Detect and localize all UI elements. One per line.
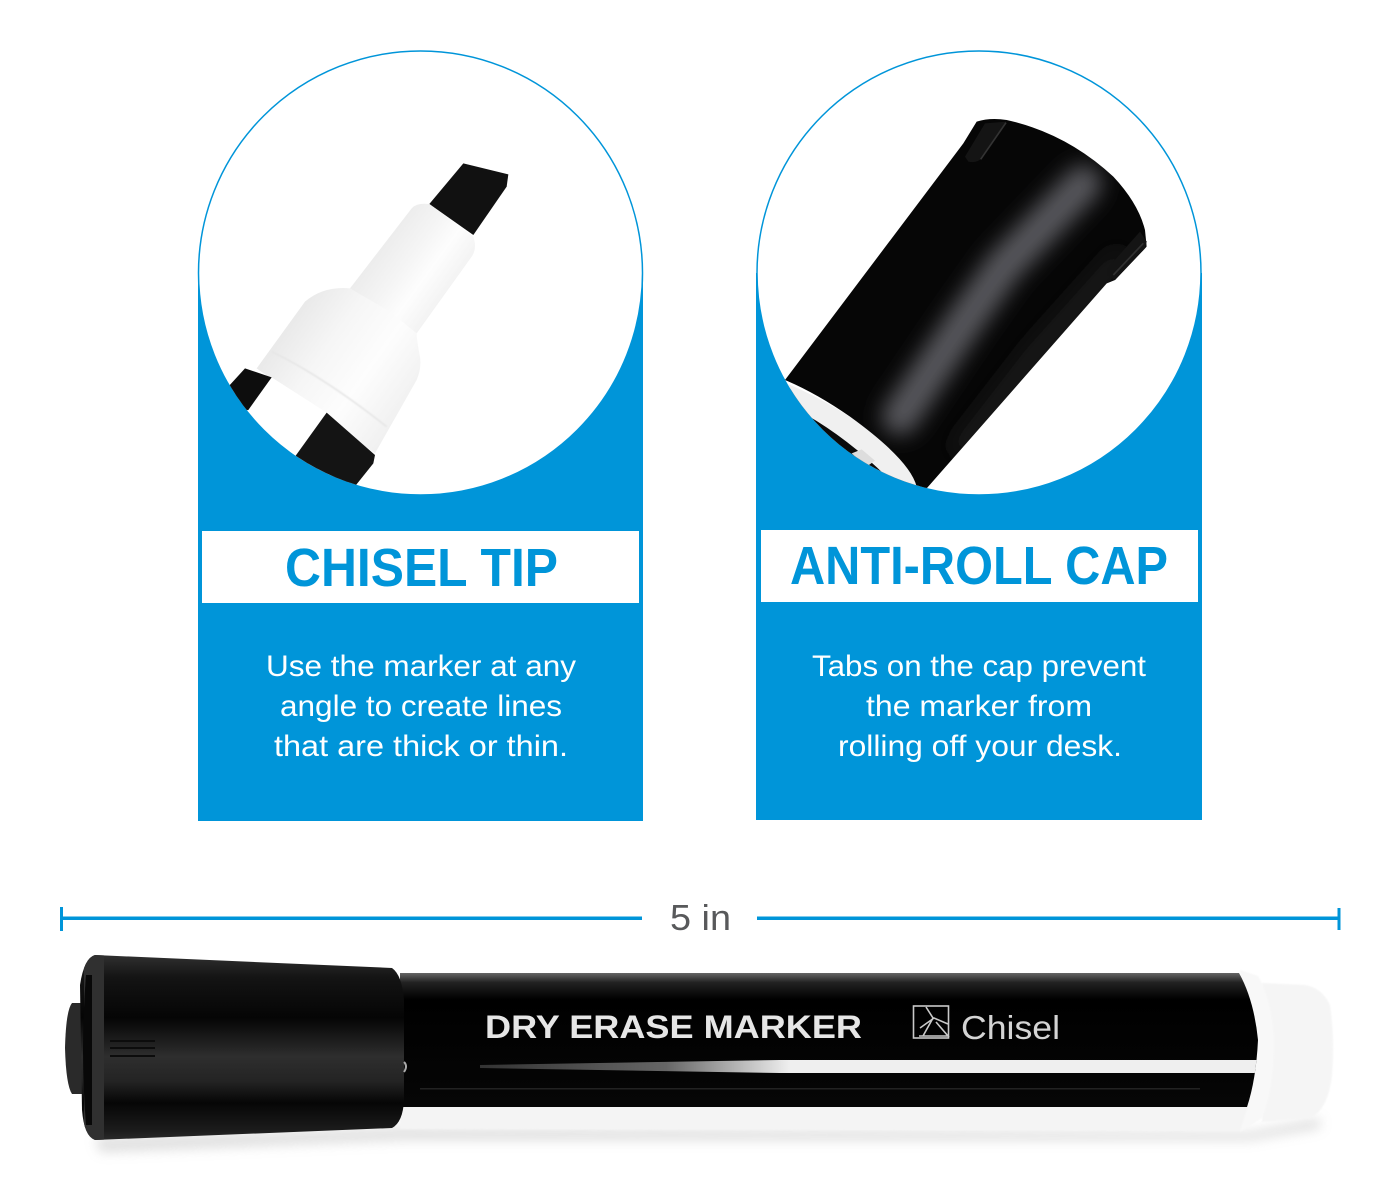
dimension label: 5 in bbox=[670, 897, 731, 938]
panel background bbox=[198, 273, 643, 821]
marker label text: DRY ERASE MARKER bbox=[485, 1009, 862, 1045]
description: rolling off your desk. bbox=[838, 730, 1122, 763]
description bbox=[266, 650, 576, 763]
product: dry erase marker bbox=[65, 950, 1333, 1152]
panel: chisel tip bbox=[198, 51, 643, 821]
marker barrel underside bbox=[400, 1100, 1250, 1131]
marker shadow bbox=[95, 1118, 1320, 1152]
heading band bbox=[761, 530, 1198, 602]
description: the marker from bbox=[866, 690, 1092, 723]
description: Tabs on the cap prevent bbox=[812, 650, 1147, 683]
heading: ANTI-ROLL CAP bbox=[790, 536, 1168, 596]
marker cap bbox=[65, 950, 410, 1145]
heading: CHISEL TIP bbox=[285, 538, 558, 598]
illustration: marker chisel tip bbox=[223, 163, 508, 488]
description: that are thick or thin. bbox=[274, 730, 568, 763]
chisel logo bbox=[914, 1006, 948, 1038]
illustration: marker cap with tabs bbox=[785, 119, 1147, 488]
cap end nub bbox=[65, 1003, 84, 1094]
circle window bbox=[198, 51, 642, 495]
dimension ruler: 5 in bbox=[60, 897, 1340, 938]
description bbox=[812, 650, 1147, 763]
marker tip end bbox=[1262, 983, 1333, 1122]
brand name: Chisel bbox=[961, 1009, 1060, 1046]
description: Use the marker at any bbox=[266, 650, 576, 683]
panel background bbox=[756, 273, 1202, 820]
heading band bbox=[202, 531, 639, 603]
circle window bbox=[757, 51, 1201, 495]
panel: anti-roll cap bbox=[750, 51, 1202, 820]
marker barrel bbox=[395, 973, 1270, 1107]
description: angle to create lines bbox=[280, 690, 562, 723]
